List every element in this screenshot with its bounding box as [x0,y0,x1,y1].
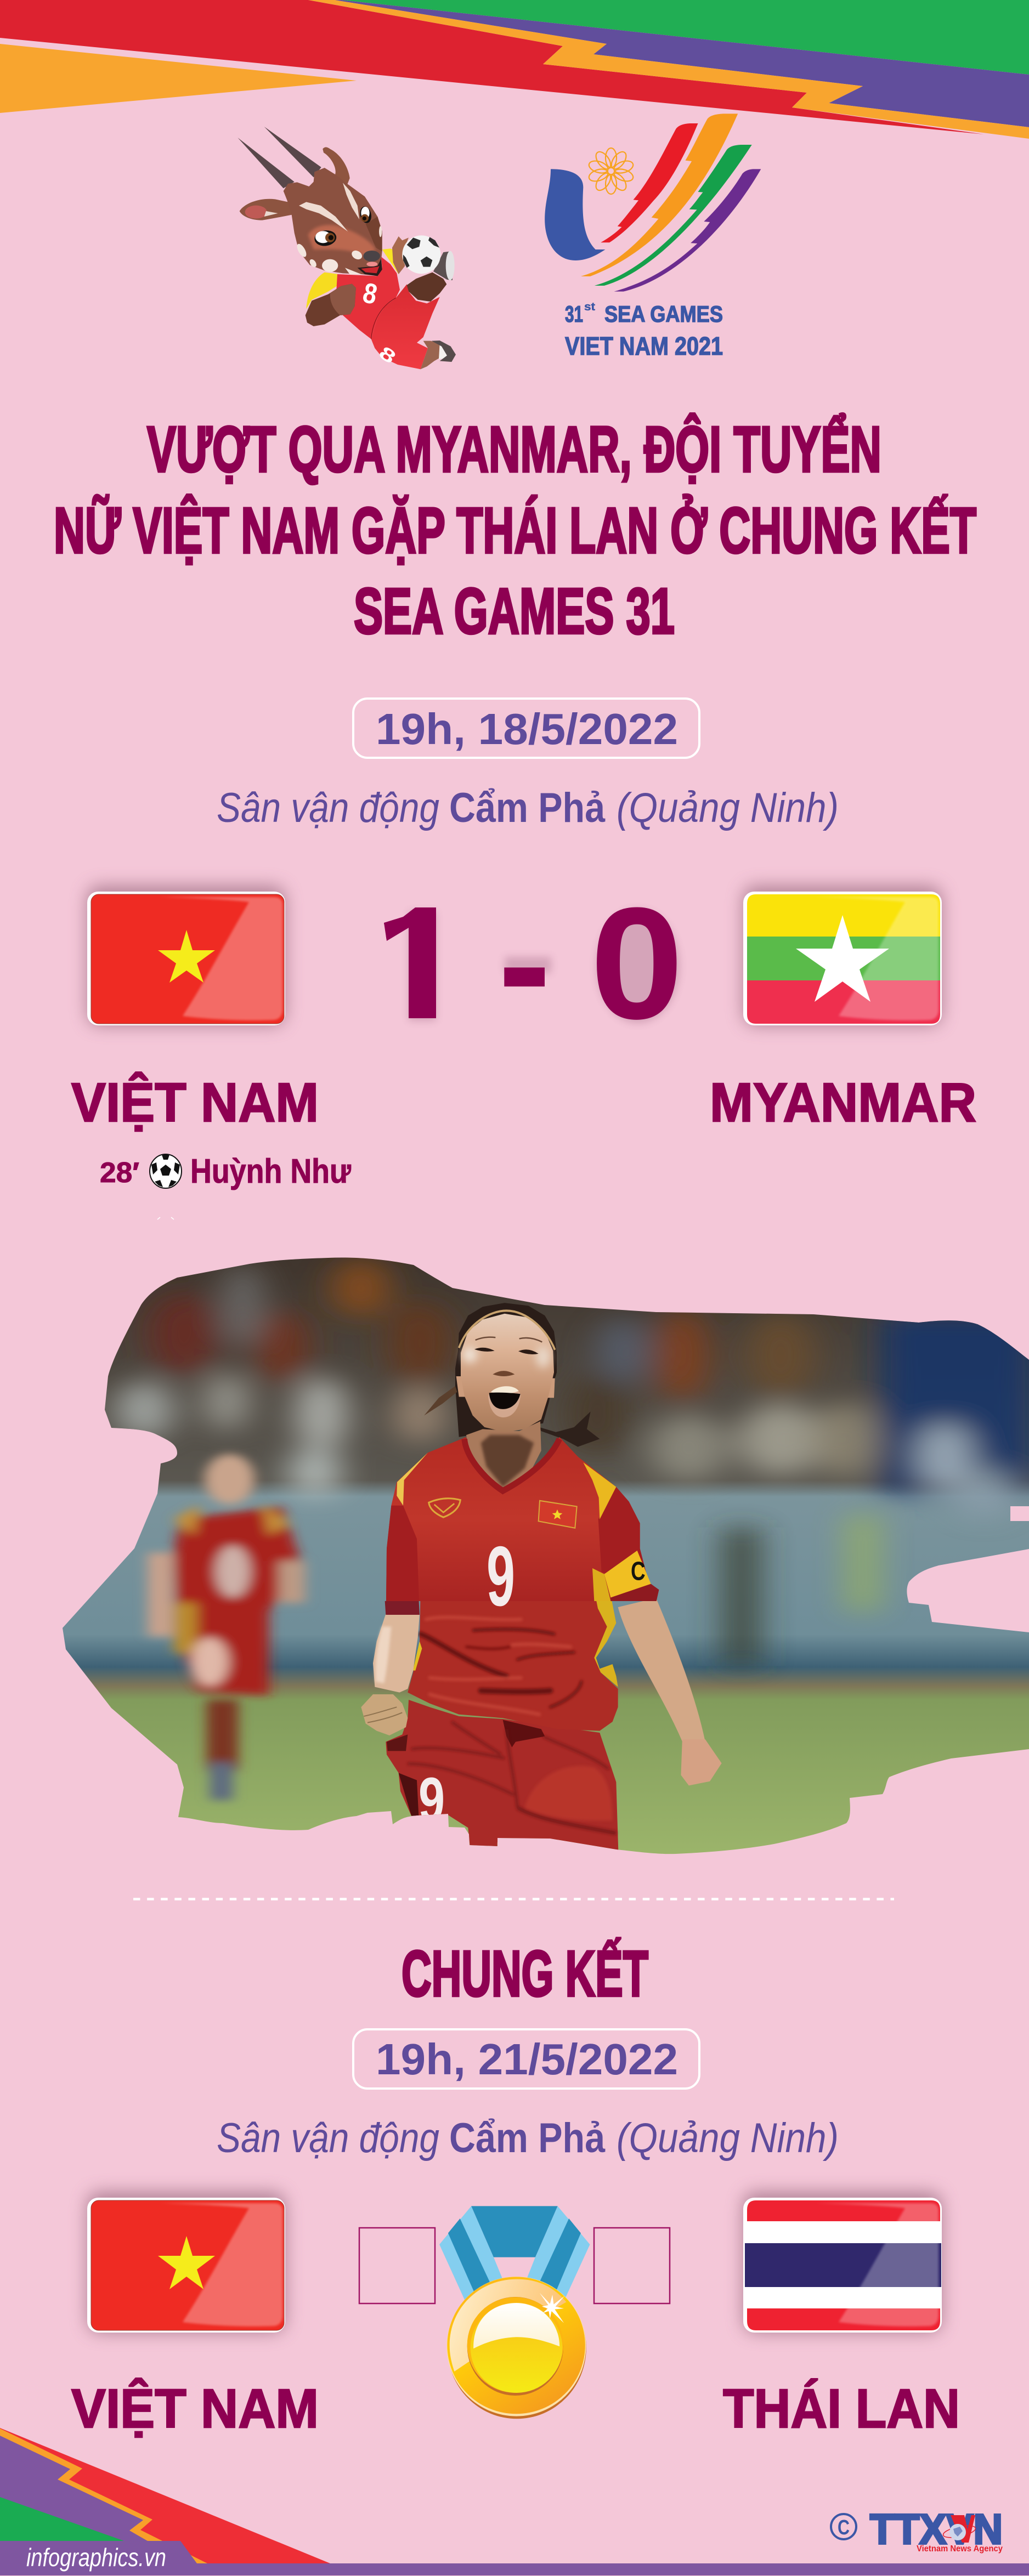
score: 1 - 0: - [498,875,551,1052]
main player: shorts, shirt hem and left arm [361,1590,618,1852]
icon: SEA Games 31 logo: 31 [565,301,583,327]
scorer line: Huỳnh Như [190,1153,351,1190]
score: 1 - 0: 0 [590,875,683,1052]
empty score box: right [594,2228,670,2303]
logo: TTXVN Vietnam News Agency: TTXVN [870,2506,1003,2553]
icon: mascot kicking a ball: 8 [375,343,399,368]
score: 1 - 0: 1 [363,875,473,1052]
main player: head and upper body: C [631,1556,646,1586]
icon: SEA Games 31 logo: VIET NAM 2021 [565,332,723,360]
flag: Vietnam (semifinal) [87,886,285,1025]
bottom purple bar [0,2563,1029,2575]
icon: football [150,1154,182,1188]
top decorative colour band [0,0,1029,139]
team label: Thái Lan: THÁI LAN [723,2378,960,2439]
stadium line: semifinal: Sân vận động [217,785,439,831]
shirt number: 9 [487,1529,515,1624]
photo: Huỳnh Như celebrating [55,1250,1029,1859]
main player: head and upper body [386,1303,659,1601]
shorts number: 9 [419,1765,445,1835]
logo: TTXVN Vietnam News Agency: C [838,2516,850,2539]
date pill: final: 19h, 21/5/2022 [376,2035,678,2084]
heading: Chung kết: CHUNG KẾT [402,1937,648,2010]
background player [148,1454,305,1800]
site label: infographics.vn: infographics.vn [26,2543,166,2572]
team label: Myanmar: MYANMAR [710,1072,976,1133]
stray white marks below scorer [157,1217,174,1219]
flag: Vietnam (final) [87,2192,285,2333]
main player: right arm [618,1598,722,1785]
scorer line [100,1153,351,1190]
icon: mascot kicking a ball: 8 [360,276,380,310]
stadium line: semifinal: Cẩm Phả [449,785,606,831]
score: 1 - 0 [384,907,682,1025]
team label: Việt Nam (final): VIỆT NAM [71,2378,319,2439]
stadium line: final: Sân vận động [217,2115,439,2161]
flag: Thailand [743,2192,942,2333]
stadium line: final: (Quảng Ninh) [617,2115,839,2161]
icon: mascot kicking a ball [238,127,456,369]
bottom-left decorative band [0,2428,330,2563]
flag: Myanmar [743,886,942,1025]
icon: SEA Games 31 logo: st [584,301,595,313]
icon: gold medal [439,2206,590,2419]
divider: dotted line [133,1898,894,1900]
date pill: semifinal: 19h, 18/5/2022 [376,705,678,753]
icon: SEA Games 31 logo [545,114,761,360]
stadium line: final [217,2115,839,2161]
logo: TTXVN Vietnam News Agency: Vietnam News Agency [917,2544,1003,2554]
stadium line: semifinal [217,785,839,831]
title: SEA GAMES 31 [354,575,675,648]
icon: SEA Games 31 logo: SEA GAMES [604,301,723,327]
photo background: blurred crowd and wall [115,1259,1029,1666]
stadium line: semifinal: (Quảng Ninh) [617,785,839,831]
team label: Việt Nam: VIỆT NAM [71,1072,319,1133]
stadium line: final: Cẩm Phả [449,2115,606,2161]
title [54,413,976,648]
empty score box: left [359,2228,435,2303]
scorer line: 28′ [100,1157,139,1189]
